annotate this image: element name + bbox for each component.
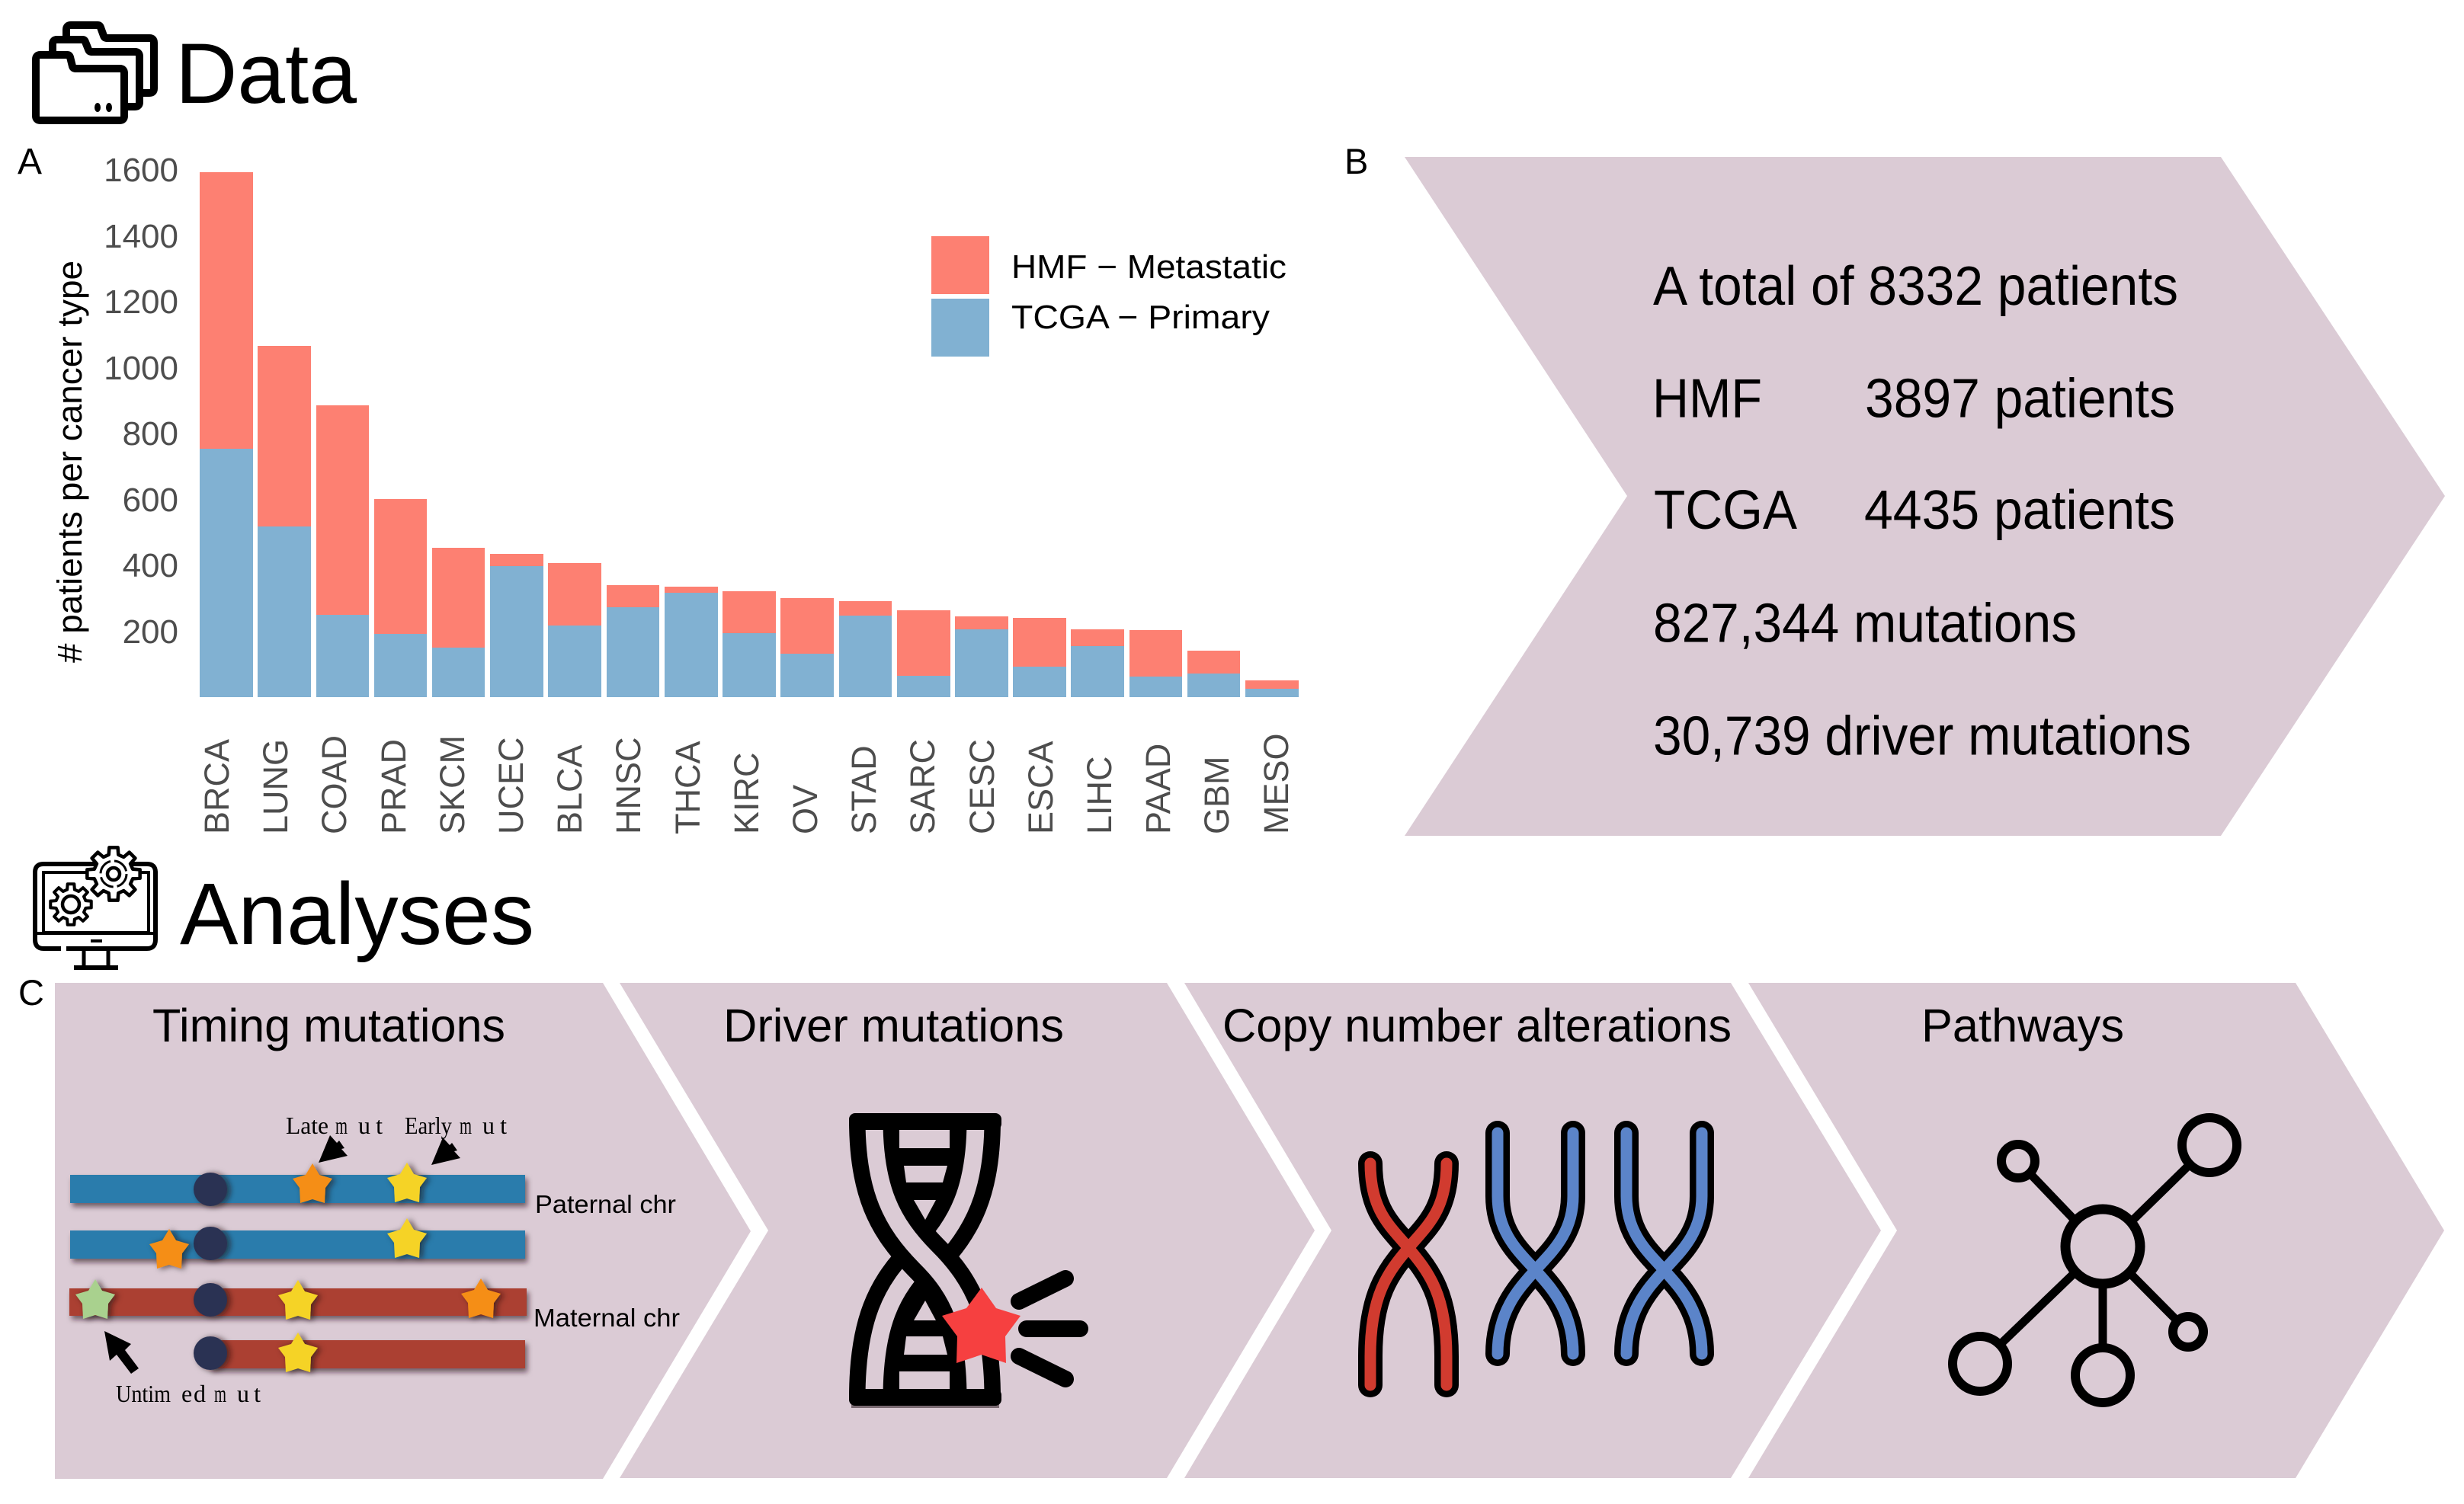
bar: ESCA [1013,618,1066,697]
bar: STAD [839,601,892,697]
x axis cancer type labels: UCEC [492,737,530,834]
panel B: summary chevron [1405,157,2445,836]
x axis cancer type labels: KIRC [727,752,766,834]
panel C4: pathways [1748,983,2444,1478]
icon: DNA with mutation star [849,1113,1080,1408]
panel C1: timing mutations: Untim [116,1380,171,1407]
panel C1: timing mutations: Timing mutations [152,1000,505,1051]
bar: MESO [1245,680,1299,697]
x axis cancer type labels: GBM [1197,756,1236,834]
icon: monitor with gears [35,847,155,970]
panel C1: timing mutations: ed [181,1380,206,1407]
panel B: summary chevron: A total of 8332 patients [1653,256,2178,317]
x axis cancer type labels: COAD [315,735,354,834]
mutation stars [75,1163,501,1372]
bar: UCEC [490,554,543,697]
panel C1: timing mutations: Early [405,1112,452,1139]
x axis cancer type labels: PRAD [374,739,413,834]
title: Analyses: Analyses [180,866,534,963]
panel C1: timing mutations: m [460,1112,472,1139]
y axis tick labels: 1200 [104,283,178,321]
bar: OV [780,598,834,697]
x axis cancer type labels: THCA [668,741,707,834]
x axis cancer type labels: LIHC [1080,756,1119,834]
bar: GBM [1187,651,1240,697]
icon: blue chromosome 1 [1498,1133,1573,1354]
x axis cancer type labels: STAD [844,745,883,834]
stacked bar chart [200,172,1299,697]
y axis tick labels: 1600 [104,152,178,189]
bar: BRCA [200,172,253,697]
bar: SKCM [432,548,485,697]
y axis tick labels: 200 [123,613,178,651]
x axis cancer type labels: HNSC [609,737,648,834]
panel B: summary chevron: HMF [1652,369,1762,430]
panel C1: timing mutations: ut [358,1112,383,1139]
bar: KIRC [723,591,776,697]
y axis tick labels: 400 [123,547,178,584]
panel C3: copy number alterations: Copy number alterations [1222,1000,1732,1051]
icon: network [1953,1118,2237,1403]
bar: LIHC [1071,629,1124,697]
bar: LUNG [258,346,311,697]
panel C1: timing mutations [55,983,751,1479]
panel C3: copy number alterations [1184,983,1881,1478]
arrow: late mutation [319,1135,348,1163]
x axis cancer type labels [197,733,1296,834]
panel C1: timing mutations: ut [237,1380,261,1407]
legend [931,236,1286,357]
bar: PRAD [374,499,427,697]
panel C4: pathways: Pathways [1921,1000,2124,1051]
panel C2: driver mutations [620,983,1315,1478]
icon: blue chromosome 2 [1626,1133,1702,1354]
y axis tick labels: 600 [123,482,178,519]
x axis cancer type labels: SKCM [433,735,472,834]
x axis cancer type labels: SARC [903,739,942,834]
arrow: untimed mutation [104,1331,139,1374]
panel label B: B [1344,141,1368,181]
y axis title: # patients per cancer type [50,261,89,663]
centromeres [194,1173,227,1370]
panel label A: A [18,142,42,182]
panel C2: driver mutations: Driver mutations [723,1000,1064,1051]
panel C1: timing mutations: Paternal chr [535,1190,676,1218]
icon: folders [36,25,154,120]
bar: PAAD [1129,630,1182,697]
x axis cancer type labels: ESCA [1021,741,1060,834]
panel B: summary chevron: TCGA [1654,480,1797,541]
legend: TCGA − Primary [1011,299,1270,336]
x axis cancer type labels: PAAD [1139,744,1178,834]
x axis cancer type labels: CESC [963,739,1001,834]
y axis tick labels: 1400 [104,218,178,255]
arrow: early mutation [431,1138,460,1165]
bar: HNSC [607,585,659,697]
y axis tick labels [104,152,178,651]
panel B: summary chevron: 30,739 driver mutations [1653,706,2191,766]
panel B: summary chevron: 827,344 mutations [1653,593,2077,654]
chromosome bars [69,1175,527,1368]
y axis tick labels: 1000 [104,350,178,387]
panel B: summary chevron: 4435 patients [1864,480,2175,541]
bar: SARC [897,610,950,697]
bar: COAD [316,405,369,697]
bar: CESC [955,616,1008,697]
y axis tick labels: 800 [123,415,178,453]
panel C1: timing mutations: ut [482,1112,507,1139]
panel label C: C [18,972,44,1013]
title: Data: Data [175,26,357,121]
x axis cancer type labels: LUNG [256,739,295,834]
x axis cancer type labels: MESO [1257,733,1296,834]
panel C1: timing mutations: m [335,1112,348,1139]
panel C1: timing mutations: Late [286,1112,328,1139]
bar: THCA [665,587,718,697]
panel C1: timing mutations: m [214,1380,226,1407]
icon: red chromosome [1370,1163,1447,1385]
x axis cancer type labels: BLCA [550,744,589,834]
legend: HMF − Metastatic [1011,248,1286,286]
bar: BLCA [548,563,601,697]
x axis cancer type labels: BRCA [197,739,236,834]
x axis cancer type labels: OV [786,785,825,834]
panel C1: timing mutations: Maternal chr [533,1304,680,1332]
panel B: summary chevron: 3897 patients [1865,369,2175,430]
